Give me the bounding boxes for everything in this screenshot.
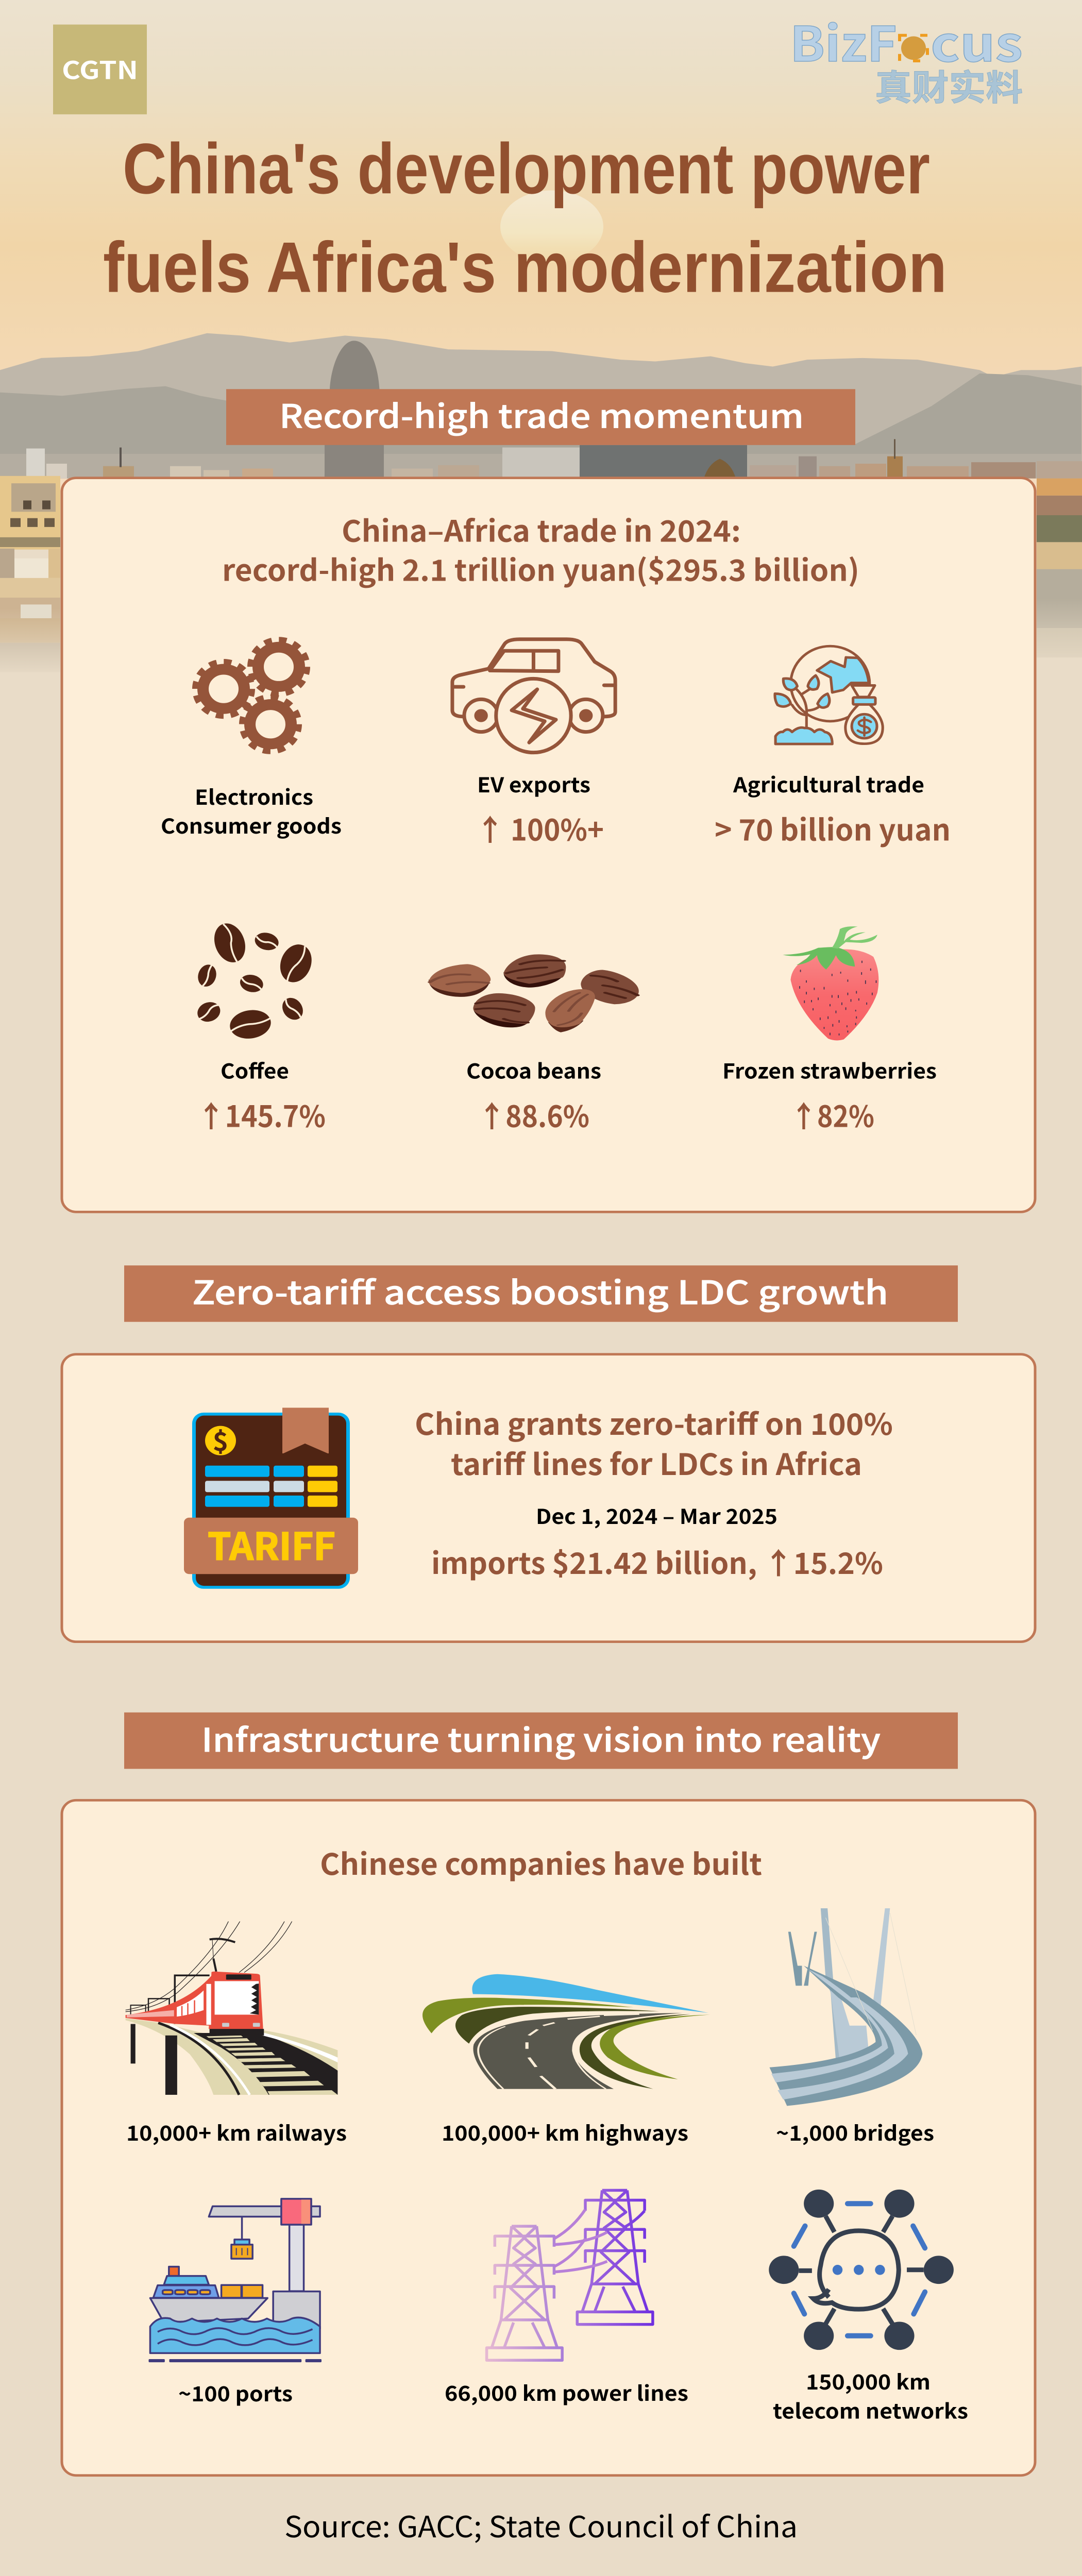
section heading: record-high trade momentum	[226, 389, 855, 445]
icon: cable-stayed bridge	[769, 1908, 922, 2106]
logo: BizFocus: 真财实料	[875, 59, 1023, 111]
label: frozen strawberries: ↑82%	[790, 1093, 874, 1136]
panel heading: China-Africa trade	[222, 507, 859, 589]
text: zero-tariff policy: China grants zero-tariff on 100%	[415, 1400, 893, 1443]
label: frozen strawberries: Frozen strawberries	[722, 1055, 937, 1084]
label: bridges: ~1,000 bridges	[776, 2116, 934, 2147]
icon: coffee beans	[194, 920, 316, 1042]
label: agricultural trade	[715, 768, 951, 849]
label: telecom networks: 150,000 km	[806, 2365, 931, 2396]
text: zero-tariff policy	[415, 1400, 893, 1583]
section heading: zero-tariff	[124, 1265, 958, 1322]
label: telecom networks	[773, 2365, 968, 2425]
label: EV exports: ↑ 100%+	[476, 806, 604, 849]
logo: CGTN	[53, 25, 147, 114]
icon: highway	[422, 1974, 711, 2089]
section heading: zero-tariff: Zero-tariff access boosting LDC growth	[192, 1266, 888, 1314]
icon: gears	[195, 640, 307, 751]
icon: tariff book: $	[213, 1421, 228, 1459]
logo: BizFocus: cus	[931, 6, 1023, 75]
icon: port and ship	[149, 2199, 320, 2361]
logo: CGTN: CGTN	[62, 51, 138, 87]
label: cocoa beans: ↑88.6%	[478, 1093, 589, 1136]
label: cocoa beans: Cocoa beans	[466, 1055, 601, 1084]
label: coffee: ↑145.7%	[197, 1093, 326, 1136]
label: coffee	[197, 1055, 326, 1136]
panel heading: China-Africa trade: China–Africa trade in 2024:	[342, 507, 741, 550]
label: agricultural trade: Agricultural trade	[733, 768, 924, 799]
label: railways: 10,000+ km railways	[126, 2116, 347, 2147]
label: EV exports: EV exports	[477, 768, 590, 799]
label: agricultural trade: > 70 billion yuan	[715, 806, 951, 849]
label: telecom networks: telecom networks	[773, 2394, 968, 2425]
label: EV exports	[476, 768, 604, 849]
text: zero-tariff policy: imports $21.42 billion, ↑15.2%	[431, 1540, 883, 1583]
icon: tariff book: TARIFF	[208, 1517, 335, 1571]
panel heading: China-Africa trade: record-high 2.1 trillion yuan($295.3 billion)	[222, 547, 859, 589]
label: ports: ~100 ports	[178, 2377, 293, 2408]
panel: trade	[62, 478, 1035, 1212]
label: electronics, consumer goods: Electronics	[195, 781, 313, 811]
label: electronics, consumer goods: Consumer goods	[161, 809, 342, 840]
label: cocoa beans	[466, 1055, 601, 1136]
label: coffee: Coffee	[221, 1055, 289, 1084]
panel: infrastructure	[62, 1800, 1035, 2476]
icon: cocoa beans	[429, 954, 639, 1032]
source note: Source: GACC; State Council of China	[284, 2503, 798, 2546]
icon: electric train	[126, 1922, 337, 2095]
section heading: infrastructure	[124, 1713, 958, 1769]
title: fuels Africa's modernization	[103, 228, 947, 308]
icon: tariff book	[184, 1408, 358, 1589]
label: highways: 100,000+ km highways	[442, 2116, 688, 2147]
logo: BizFocus	[790, 6, 1023, 111]
panel heading: Chinese companies: Chinese companies have built	[320, 1841, 762, 1884]
label: power lines: 66,000 km power lines	[445, 2377, 688, 2407]
section heading: record-high trade momentum: Record-high trade momentum	[279, 390, 804, 437]
title	[103, 129, 947, 308]
text: zero-tariff policy: Dec 1, 2024 – Mar 2025	[536, 1500, 777, 1530]
icon: agricultural trade	[775, 646, 883, 744]
logo: BizFocus: BizF	[790, 6, 897, 75]
panel: zero-tariff	[62, 1354, 1035, 1642]
label: electronics, consumer goods	[161, 781, 342, 840]
icon: electric car	[452, 639, 615, 753]
icon: strawberry	[783, 926, 878, 1040]
label: frozen strawberries	[722, 1055, 937, 1136]
section heading: infrastructure: Infrastructure turning vision into reality	[201, 1714, 881, 1761]
icon: power pylons	[487, 2190, 653, 2360]
text: zero-tariff policy: tariff lines for LDCs in Africa	[451, 1441, 862, 1483]
icon: telecom network	[769, 2190, 954, 2350]
